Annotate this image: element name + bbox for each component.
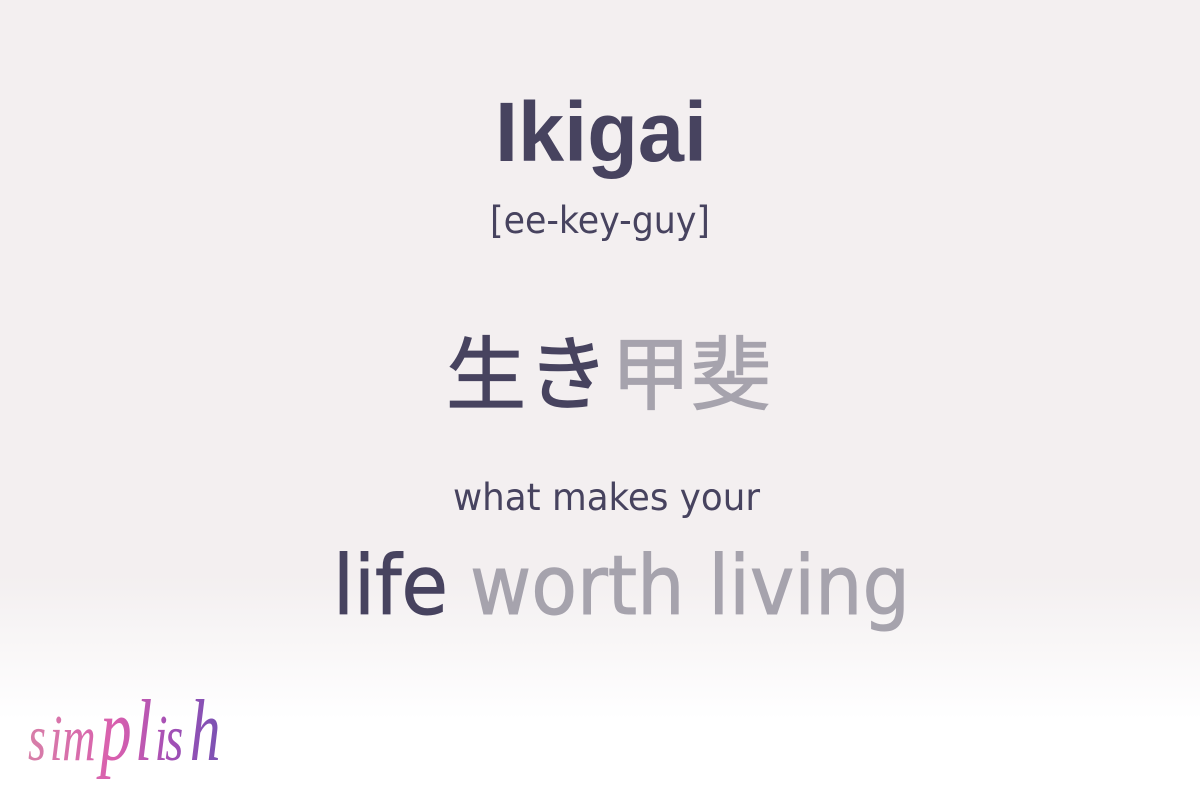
tagline (333, 539, 910, 634)
tagline: life: life (333, 539, 448, 634)
logo: simplish: p (96, 680, 132, 780)
ikigai kanji: life: き (527, 330, 609, 421)
logo: simplish: l (135, 682, 152, 780)
ikigai kanji: worth: 甲斐 (611, 331, 771, 420)
subtitle: what makes your (453, 476, 761, 519)
japanese term (446, 330, 771, 421)
ikigai kanji: life: 生 (446, 331, 526, 420)
logo: simplish: s (165, 702, 183, 775)
logo: simplish: m (62, 702, 96, 775)
logo: simplish: h (190, 682, 220, 780)
tagline: worth living: worth living (470, 539, 910, 634)
logo: simplish: i (50, 702, 63, 775)
logo: simplish: i (155, 702, 168, 775)
pronunciation: [ee-key-guy] (490, 199, 710, 242)
title: Ikigai (495, 85, 707, 179)
logo: simplish: s (28, 702, 46, 775)
